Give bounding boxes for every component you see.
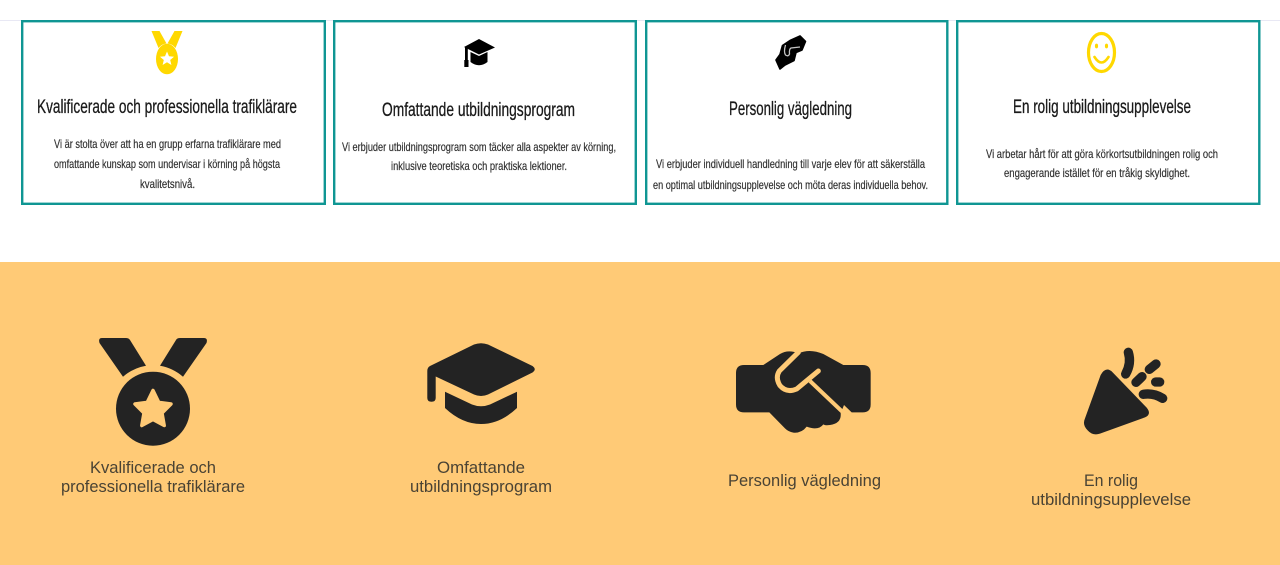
label: utbildningsprogram (410, 478, 552, 496)
icon: medal (99, 338, 207, 446)
label: Kvalificerade och (90, 459, 216, 477)
icon: yellow medal (152, 31, 182, 74)
feature: medal (61, 338, 245, 496)
panel: Personlig vägledning (646, 21, 947, 204)
description text: omfattande kunskap som undervisar i körning på högsta (54, 157, 280, 171)
label: utbildningsupplevelse (1031, 491, 1191, 509)
description text: Vi är stolta över att ha en grupp erfarna trafiklärare med (54, 137, 281, 151)
description text: kvalitetsnivå. (140, 177, 195, 191)
description text: inklusive teoretiska och praktiska lektioner. (391, 159, 567, 173)
icon: black handshake (776, 36, 806, 69)
description text: engagerande istället för en tråkig skyldighet. (1004, 166, 1190, 180)
label: Omfattande (437, 459, 525, 477)
label: professionella trafiklärare (61, 478, 245, 496)
label: Personlig vägledning (728, 472, 881, 490)
description text (986, 147, 1218, 180)
description text (342, 140, 616, 173)
feature: graduation cap (410, 343, 552, 496)
icon: handshake (736, 351, 871, 433)
label (61, 459, 245, 496)
heading: Kvalificerade och professionella trafiklärare (37, 96, 297, 118)
description text: en optimal utbildningsupplevelse och möta deras individuella behov. (653, 178, 928, 192)
description text: Vi erbjuder utbildningsprogram som täcker alla aspekter av körning, (342, 140, 616, 154)
feature: handshake (728, 351, 881, 490)
panel: En rolig utbildningsupplevelse (957, 21, 1259, 204)
feature: party popper (1031, 352, 1191, 509)
label: En rolig (1084, 472, 1138, 490)
heading: En rolig utbildningsupplevelse (1013, 96, 1191, 118)
description text: Vi arbetar hårt för att göra körkortsutbildningen rolig och (986, 147, 1218, 161)
heading: Personlig vägledning (729, 98, 852, 120)
panel: orange feature band (0, 262, 1280, 565)
icon: graduation cap (427, 343, 535, 424)
panel: Omfattande utbildningsprogram (334, 21, 636, 204)
icon: graduation cap (464, 39, 495, 67)
heading: Omfattande utbildningsprogram (382, 99, 575, 121)
label (410, 459, 552, 496)
panel: Kvalificerade och professionella trafiklärare (22, 21, 325, 204)
description text (653, 157, 928, 192)
description text: Vi erbjuder individuell handledning till varje elev för att säkerställa (656, 157, 925, 171)
icon: party popper (1084, 352, 1163, 434)
icon: yellow smiley (1088, 34, 1114, 72)
label (1031, 472, 1191, 509)
description text (54, 137, 281, 191)
